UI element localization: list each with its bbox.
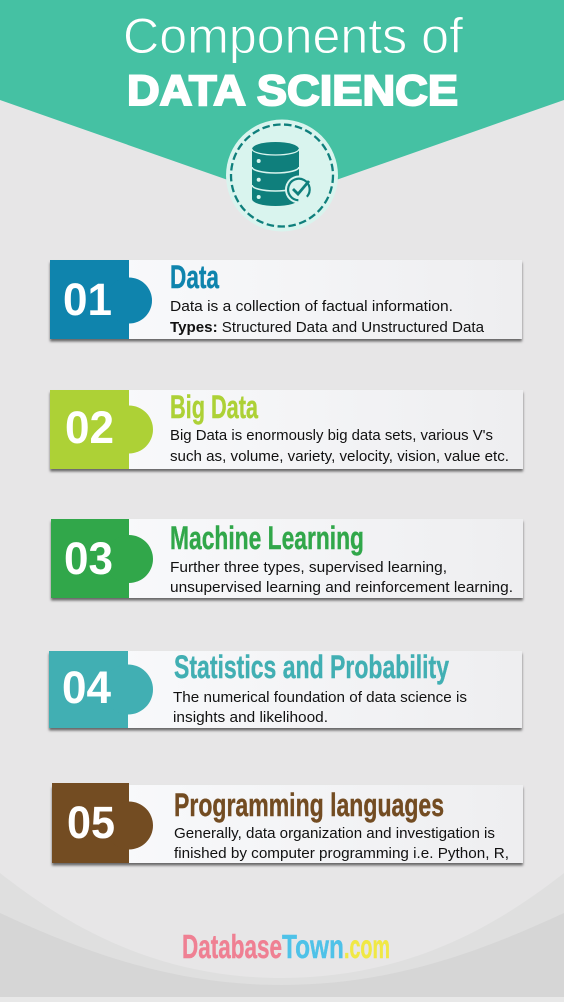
heading: Programming languages: Programming languages	[174, 787, 444, 823]
title: Components of	[123, 8, 463, 64]
number badge 01: 01	[63, 274, 112, 325]
number badge 02	[50, 390, 153, 469]
number badge 01	[50, 260, 152, 339]
text: statistics description: The numerical foundation of data science is	[173, 689, 467, 706]
logo: DatabaseTown.com: Town	[282, 928, 344, 965]
text: big data description: Big Data is enormously big data sets, various V's	[170, 427, 493, 444]
bottom background curves	[0, 873, 564, 1002]
text: data description: Types: Structured Data and Unstructured Data	[170, 319, 485, 336]
text: statistics description: insights and likelihood.	[173, 709, 328, 726]
text: data description	[170, 298, 485, 336]
logo: DatabaseTown.com: Database	[182, 928, 282, 965]
heading: Data: Data	[170, 259, 219, 295]
number badge 04: 04	[62, 662, 111, 713]
number badge 02: 02	[65, 402, 114, 453]
panel: 01 Data	[50, 259, 522, 339]
header banner	[0, 0, 564, 199]
text: programming description: finished by computer programming i.e. Python, R,	[174, 845, 509, 862]
number badge 04	[49, 651, 153, 728]
number badge 05	[52, 783, 153, 863]
number badge 03	[51, 519, 153, 598]
title	[123, 8, 463, 115]
panel: 04 Statistics and Probability	[49, 649, 522, 728]
heading: Statistics and Probability: Statistics and Probability	[174, 649, 449, 685]
text: big data description: such as, volume, variety, velocity, vision, value etc.	[170, 448, 509, 465]
icon: database with check mark	[226, 120, 338, 232]
heading: Big Data: Big Data	[170, 389, 258, 425]
text: machine learning description: unsupervised learning and reinforcement learning.	[170, 579, 513, 596]
panel: 02 Big Data	[50, 389, 523, 469]
text: statistics description	[173, 689, 467, 726]
number badge 03: 03	[64, 533, 113, 584]
panel: 05 Programming languages	[52, 783, 523, 863]
title: DATA SCIENCE	[127, 67, 458, 115]
text: programming description	[174, 825, 509, 862]
text: programming description: Generally, data organization and investigation is	[174, 825, 495, 842]
panel: 03 Machine Learning	[51, 519, 523, 598]
number badge 05: 05	[67, 797, 115, 848]
text: big data description	[170, 427, 509, 465]
heading: Machine Learning: Machine Learning	[170, 520, 364, 556]
logo: DatabaseTown.com: .com	[344, 928, 390, 965]
text: data description: Data is a collection of factual information.	[170, 298, 453, 315]
text: machine learning description: Further three types, supervised learning,	[170, 559, 447, 576]
text: machine learning description	[170, 559, 513, 596]
